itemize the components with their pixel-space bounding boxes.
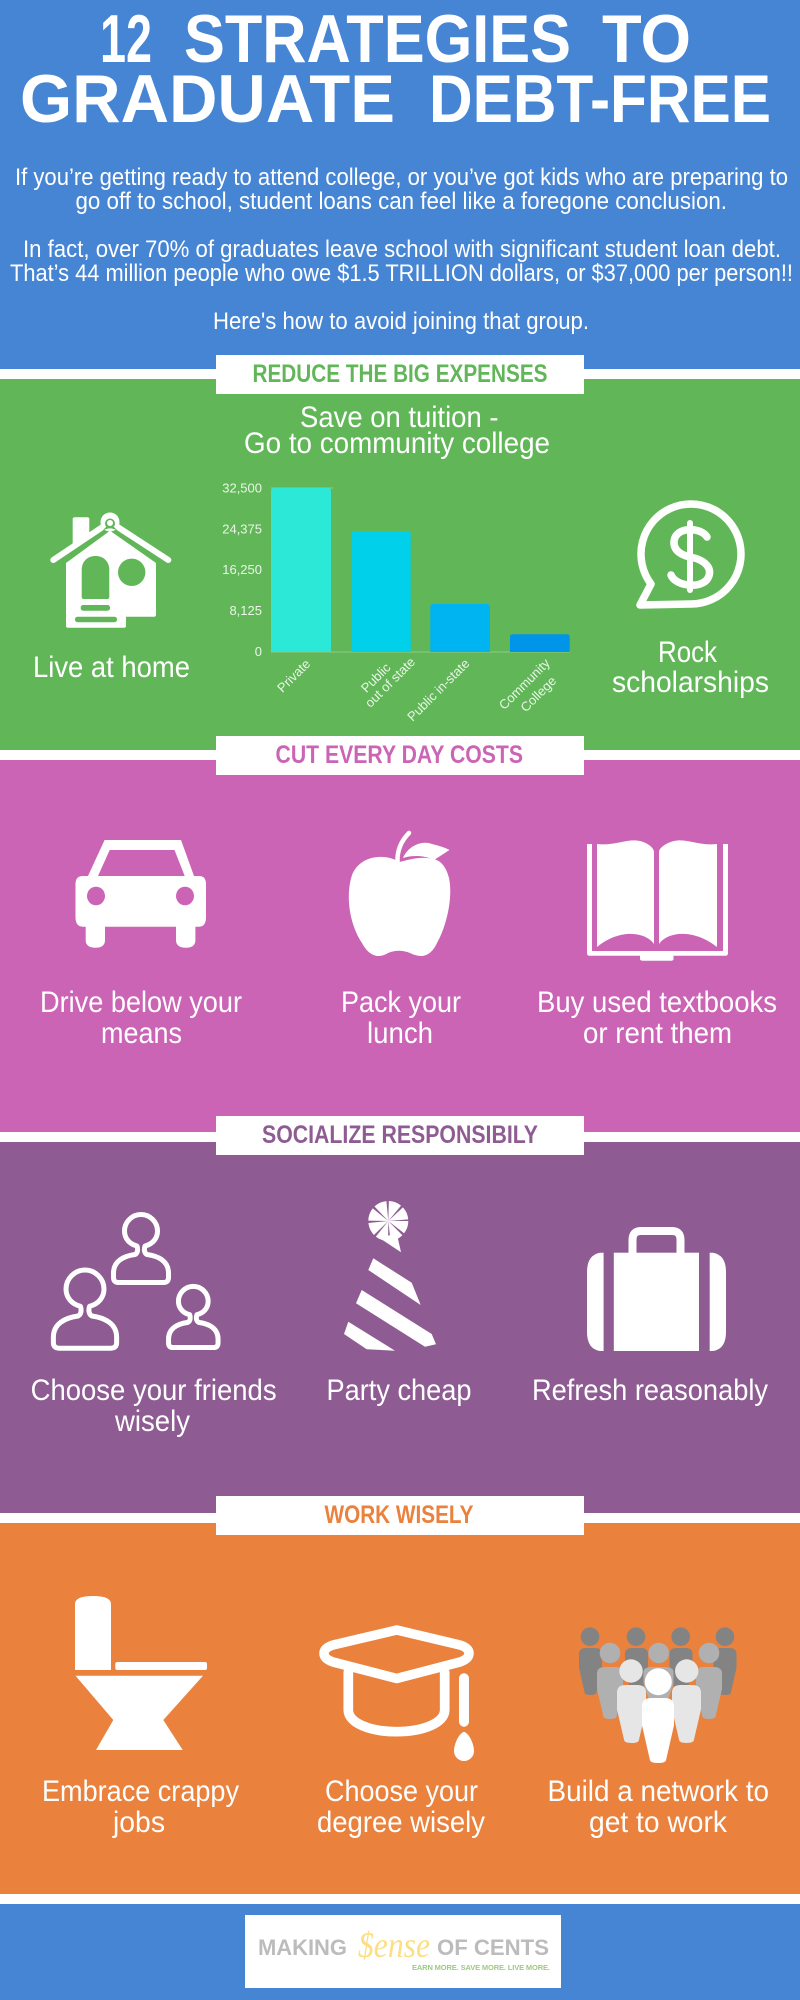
heading: socialize responsibily: SOCIALIZE RESPONSIBILY: [262, 1121, 538, 1149]
y axis labels: [222, 480, 262, 659]
title: GRADUATE: [20, 61, 395, 137]
labels: work wisely: Choose your: [325, 1775, 478, 1808]
x axis labels: Community: [496, 655, 553, 713]
panel: work wisely background: [0, 1523, 800, 1894]
y axis labels: 32,500: [222, 480, 262, 496]
label: rock scholarships: scholarships: [612, 666, 769, 699]
bar: public in-state: [430, 604, 490, 652]
panel: reduce the big expenses background: [0, 379, 800, 750]
labels: work wisely: jobs: [112, 1806, 165, 1839]
heading: cut every day costs: CUT EVERY DAY COSTS: [276, 741, 523, 769]
heading: work wisely: [216, 1496, 584, 1535]
labels: cut every day costs: Buy used textbooks: [537, 986, 777, 1019]
intro text: go off to school, student loans can feel like a foregone conclusion.: [76, 188, 727, 215]
heading: work wisely: WORK WISELY: [324, 1501, 474, 1529]
chart title: Save on tuition -: [300, 401, 498, 434]
bar: private: [271, 488, 331, 652]
x axis labels: Private: [274, 656, 313, 695]
divider strips: [0, 369, 800, 1904]
icon: apple: [349, 833, 450, 956]
labels: work wisely: Embrace crappy: [42, 1775, 239, 1808]
labels: socialize responsibly: Refresh reasonably: [532, 1374, 768, 1407]
logo: making sense of cents: [245, 1915, 561, 1988]
heading: cut every day costs: [216, 736, 584, 775]
bar: public out of state: [351, 531, 411, 652]
title: 12: [100, 1, 152, 77]
labels: work wisely: Build a network to: [548, 1775, 769, 1808]
icon: group of people: [579, 1627, 736, 1763]
label: rock scholarships: Rock: [658, 636, 718, 669]
labels: cut every day costs: Drive below your: [40, 986, 242, 1019]
panel: header background: [0, 0, 800, 369]
chart title: Go to community college: [244, 427, 550, 460]
x axis labels: [274, 654, 559, 724]
bar chart: tuition: [222, 480, 570, 724]
x axis labels: out of state: [362, 654, 418, 710]
y axis labels: 0: [255, 644, 262, 659]
icon: toilet: [75, 1596, 207, 1750]
panel: socialize responsibly background: [0, 1142, 800, 1513]
labels: socialize responsibly: [31, 1374, 768, 1438]
icon: speech bubble with dollar: [640, 504, 741, 605]
labels: cut every day costs: means: [101, 1017, 182, 1050]
title: STRATEGIES: [184, 1, 571, 77]
labels: socialize responsibly: wisely: [114, 1405, 190, 1438]
icon: open book: [587, 840, 728, 961]
heading: reduce the big expenses: [216, 355, 584, 394]
heading: reduce the big expenses: REDUCE THE BIG EXPENSES: [252, 360, 548, 388]
labels: socialize responsibly: Choose your friends: [31, 1374, 277, 1407]
logo: making sense of cents: EARN MORE. SAVE MORE. LIVE MORE.: [412, 1963, 550, 1972]
labels: cut every day costs: or rent them: [583, 1017, 732, 1050]
title: [20, 1, 771, 137]
icon: graduation cap: [324, 1630, 474, 1761]
x axis labels: Public in-state: [404, 656, 472, 724]
logo: making sense of cents: OF CENTS: [437, 1935, 549, 1960]
x axis labels: Public: [358, 660, 394, 696]
labels: cut every day costs: Pack your: [341, 986, 461, 1019]
chart title: [244, 401, 550, 460]
label: rock scholarships: [612, 636, 769, 699]
label: live at home: Live at home: [33, 651, 190, 684]
icon: suitcase: [587, 1231, 726, 1351]
logo: making sense of cents: MAKING: [258, 1935, 347, 1960]
intro text: [10, 164, 793, 335]
x axis labels: College: [517, 673, 559, 715]
bar: community college: [510, 634, 570, 652]
labels: work wisely: degree wisely: [317, 1806, 485, 1839]
title: TO: [602, 1, 691, 77]
labels: socialize responsibly: Party cheap: [326, 1374, 472, 1407]
icon: house: [53, 512, 168, 628]
icon: party hat: [344, 1211, 436, 1351]
y axis labels: 8,125: [229, 603, 262, 618]
logo: making sense of cents: $ense: [358, 1925, 430, 1965]
panel: footer background: [0, 1904, 800, 2000]
panel: cut every day costs background: [0, 760, 800, 1132]
y axis labels: 24,375: [222, 522, 262, 536]
icon: three friends: [53, 1214, 218, 1348]
labels: cut every day costs: [40, 986, 777, 1050]
intro text: Here's how to avoid joining that group.: [213, 308, 589, 335]
icon: car: [76, 840, 206, 948]
labels: work wisely: get to work: [589, 1806, 728, 1839]
heading: socialize responsibily: [216, 1116, 584, 1155]
y axis labels: 16,250: [222, 562, 262, 577]
labels: work wisely: [42, 1775, 769, 1839]
labels: cut every day costs: lunch: [367, 1017, 433, 1050]
